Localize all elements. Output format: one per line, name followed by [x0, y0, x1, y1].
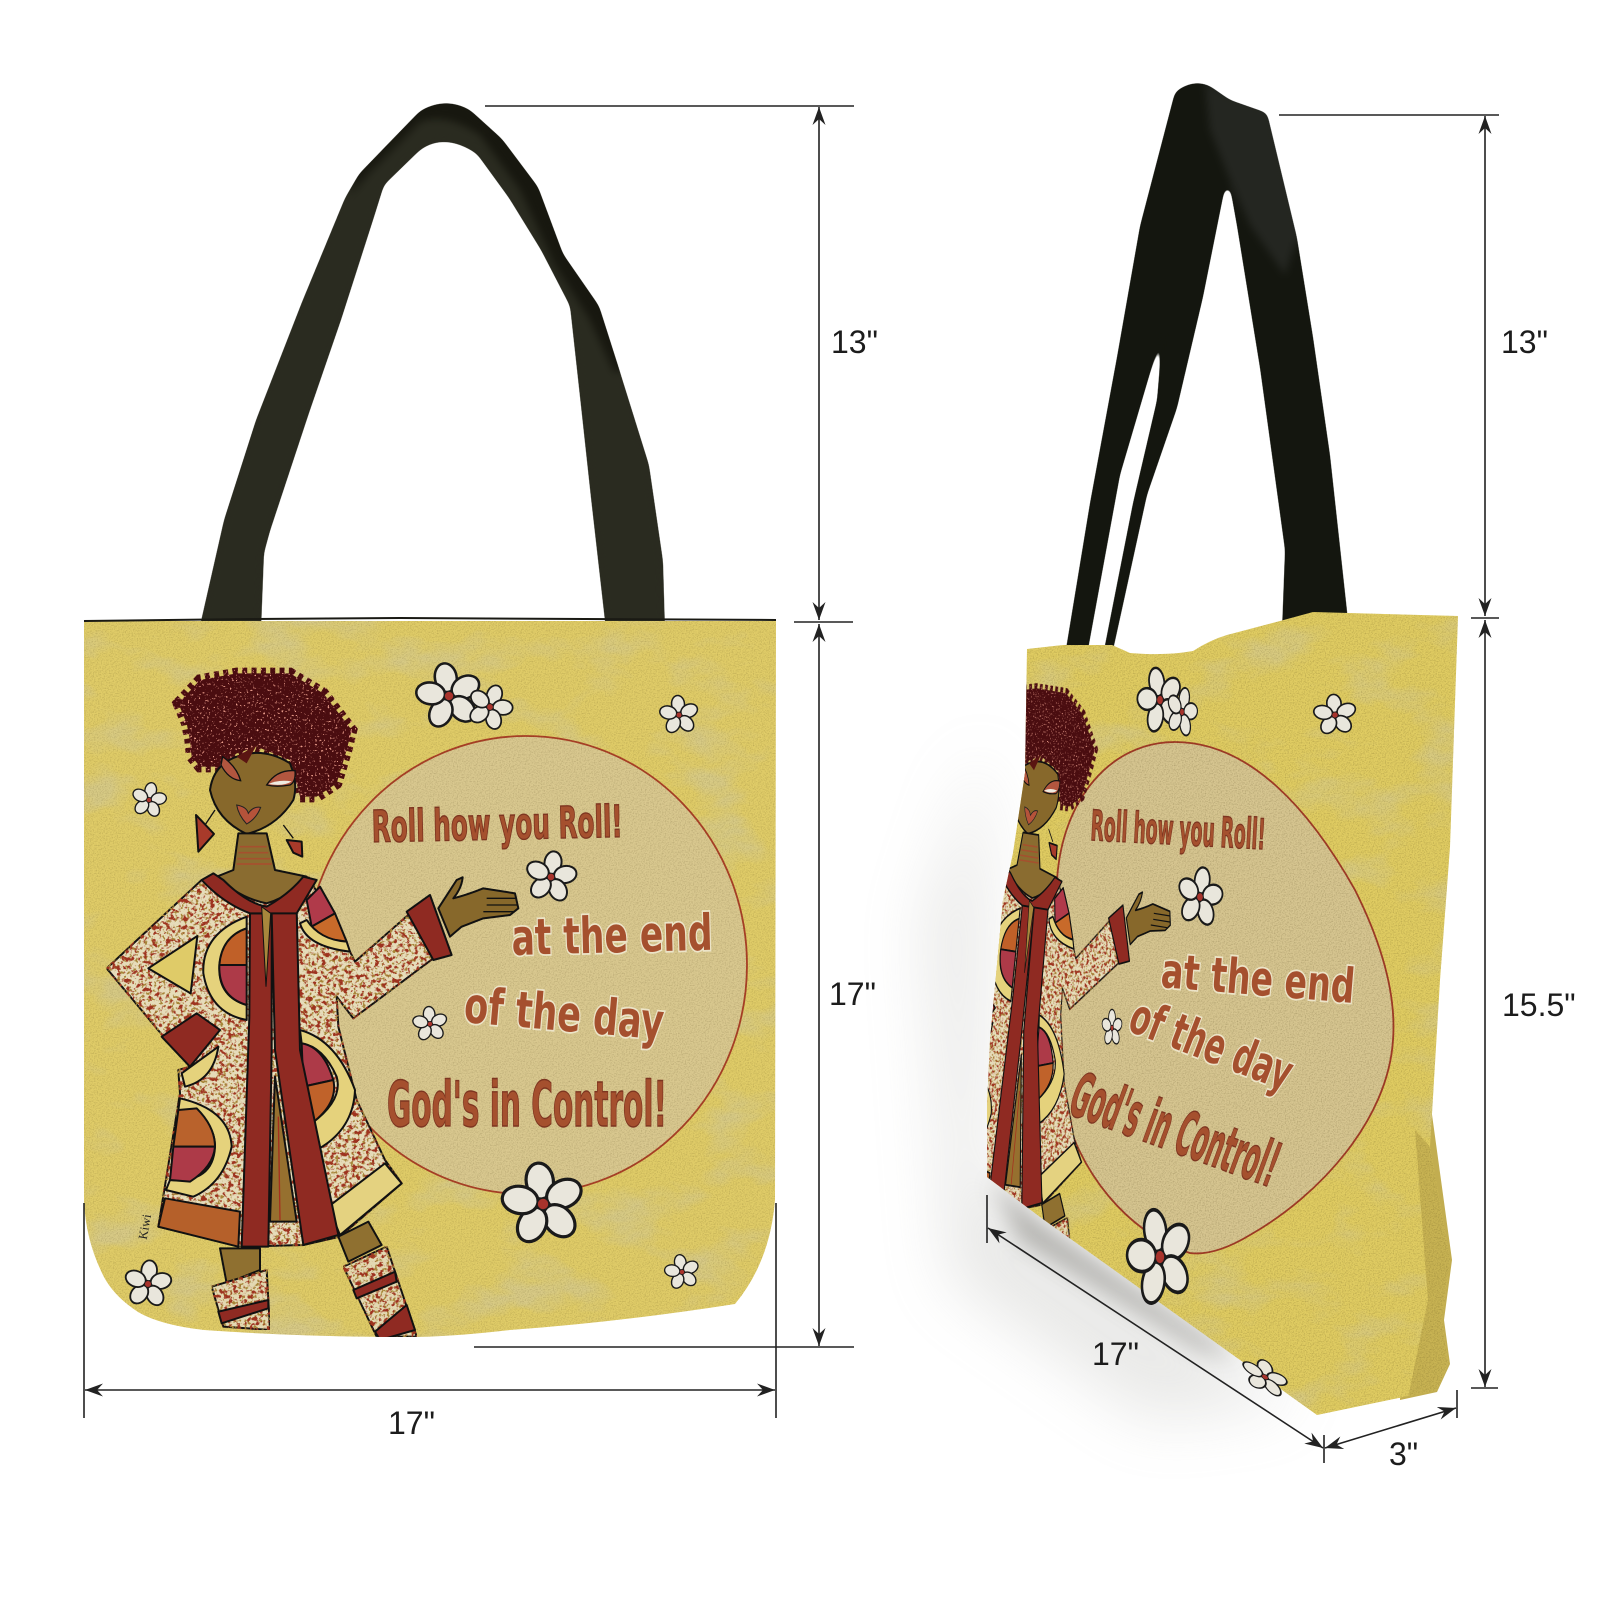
side quote text: at the end	[1159, 943, 1357, 1015]
front fabric texture	[84, 620, 776, 1340]
side view tote bag	[905, 83, 1460, 1420]
hip gap	[148, 936, 197, 993]
front bag body	[84, 618, 776, 1340]
side figure	[905, 677, 1191, 1314]
side contact shadow	[990, 1178, 1240, 1360]
coat chest semicircle	[203, 917, 247, 1020]
neck rings	[237, 847, 272, 864]
illustrated woman figure	[107, 673, 518, 1340]
signature: Kiwi	[136, 1213, 154, 1241]
side fabric texture	[980, 610, 1460, 1420]
face	[210, 753, 295, 834]
side mottling	[1026, 616, 1458, 1408]
label: width side: 17"	[1092, 1336, 1139, 1372]
front quote text: God's in Control!	[387, 1068, 667, 1141]
left cuff	[162, 1013, 220, 1087]
coat lower right semicircle	[300, 1030, 355, 1150]
right cuff	[407, 895, 452, 960]
front speech circle	[305, 736, 747, 1194]
side fold	[1408, 1130, 1450, 1398]
label: body height front: 17"	[829, 976, 876, 1012]
hair	[178, 673, 352, 797]
coat lower left semicircle	[166, 1098, 232, 1197]
side quote text: Roll how you Roll!	[1089, 801, 1267, 859]
front quote text: Roll how you Roll!	[371, 797, 623, 853]
side bag body	[987, 612, 1458, 1415]
side soft shadow	[925, 740, 1300, 1420]
side dimension lines	[987, 115, 1499, 1463]
coat front strips and collar	[202, 873, 338, 1247]
boots	[212, 1247, 417, 1340]
front view tote bag	[84, 103, 776, 1340]
under dress	[270, 1077, 297, 1222]
label: strap height side: 13"	[1501, 324, 1548, 360]
side flowers	[1101, 659, 1360, 1403]
side bag straps	[1065, 83, 1348, 655]
front quote text	[371, 797, 713, 1141]
legs	[220, 1222, 382, 1283]
label: strap height front: 13"	[831, 324, 878, 360]
hair fringe	[237, 745, 257, 763]
front flowers	[121, 658, 703, 1310]
left eye	[221, 757, 241, 781]
lips	[237, 805, 261, 824]
neck and chest	[217, 833, 307, 903]
front quote text: at the end	[511, 904, 713, 967]
side quote text	[1061, 801, 1357, 1201]
hand	[438, 877, 518, 937]
front dimension lines	[84, 106, 854, 1418]
front quote text: of the day	[462, 976, 666, 1051]
front bag strap	[199, 103, 665, 630]
label: gusset depth: 3"	[1389, 1436, 1418, 1472]
coat shoulder panels	[300, 887, 350, 952]
label: width front: 17"	[388, 1405, 435, 1441]
coat hem bands	[158, 1163, 402, 1247]
right eye	[267, 771, 295, 786]
earrings	[196, 810, 302, 857]
side speech circle	[1055, 742, 1393, 1253]
label: body height side: 15.5"	[1502, 987, 1576, 1023]
coat	[107, 877, 433, 1247]
side bag back panel	[1400, 1100, 1452, 1400]
side quote text: of the day	[1122, 987, 1301, 1102]
